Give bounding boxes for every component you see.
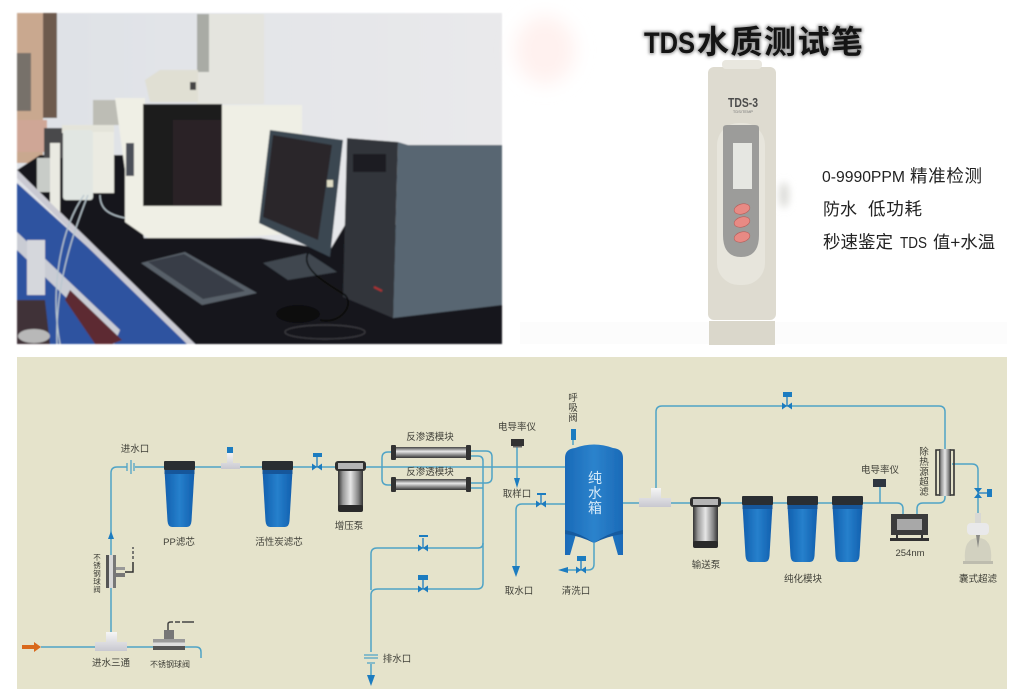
label: vertical valve: 阀 — [93, 585, 101, 594]
arrow: raw water inlet — [22, 642, 41, 652]
icon: purification module 2 — [787, 496, 818, 562]
icon: capsule filter — [963, 513, 993, 564]
arrow: sample — [514, 478, 520, 488]
icon: PP filter — [164, 461, 195, 527]
door at left of the photo — [17, 13, 57, 163]
label: breather valve: 呼 — [568, 393, 578, 404]
title: TDS pen: TDS — [644, 27, 695, 60]
label: ultrafilter: 源 — [919, 467, 929, 478]
label: 清洗口 — [562, 585, 590, 597]
text: pen features: 秒速鉴定 — [823, 232, 893, 252]
icon: valve before booster pump — [312, 453, 322, 470]
label: vertical valve: 锈 — [93, 560, 101, 570]
model label: TDS-3 — [728, 96, 758, 110]
text: pen features — [822, 166, 995, 252]
icon: RO module bottom — [391, 477, 471, 492]
label: 输送泵 — [692, 559, 721, 571]
tubing — [56, 195, 125, 344]
label: vertical valve: 球 — [93, 576, 101, 586]
label: vertical valve: 不 — [93, 553, 101, 562]
icon: reject valve 1 — [418, 535, 428, 552]
title: TDS pen: TDS — [644, 27, 695, 60]
label: 进水口 — [121, 443, 149, 455]
icon: inlet port — [127, 460, 134, 474]
label: 电导率仪 — [861, 464, 899, 476]
label: 取水口 — [505, 585, 533, 597]
label: 反渗透模块 — [406, 431, 454, 443]
text: pen features: 值+水温 — [933, 233, 995, 252]
panel: water purification process diagram — [17, 357, 1007, 689]
label: 不锈钢球阀 — [150, 659, 190, 669]
monitor — [259, 130, 343, 280]
label: PP滤芯 — [163, 536, 195, 548]
label: 排水口 — [383, 653, 411, 665]
icon: booster pump — [335, 461, 366, 512]
icon: flow sensor — [221, 447, 240, 469]
label: ultrafilter: 超 — [919, 476, 929, 488]
icon: breather valve — [571, 429, 576, 440]
label: 电导率仪 — [498, 421, 536, 433]
label: vertical valve: 钢 — [93, 568, 101, 578]
label: breather valve: 吸 — [568, 403, 578, 414]
mouse and cables — [276, 253, 365, 339]
icon: wash valve — [576, 556, 586, 574]
icon: delivery pump — [690, 497, 721, 548]
icon: pure water tank: 纯 — [588, 470, 602, 486]
keyboard — [141, 252, 257, 305]
label: ultrafilter: 除 — [919, 446, 929, 458]
computer tower — [343, 138, 502, 318]
icon: activated carbon filter — [262, 461, 293, 527]
text: pen features: 低功耗 — [868, 199, 922, 219]
label: 进水三通 — [92, 657, 130, 669]
icon: purification module 1 — [742, 496, 773, 562]
instrument column — [145, 14, 264, 104]
text: pen features: 防水 — [823, 200, 857, 219]
analyser instrument — [93, 98, 302, 238]
icon: conductivity meter — [511, 439, 524, 448]
icon: pyrogen-removal ultrafilter — [936, 449, 954, 496]
label: ultrafilter: 滤 — [919, 486, 929, 498]
icon: vertical ball valve — [106, 547, 133, 588]
icon: inlet tee — [95, 632, 127, 651]
lab bench top — [17, 155, 502, 344]
icon: drain port — [364, 655, 378, 663]
icon: RO module top — [391, 445, 471, 460]
icon: horizontal ball valve — [153, 622, 194, 650]
label: 取样口 — [503, 488, 531, 500]
blue bench cabinet — [17, 170, 195, 344]
title: TDS pen: 水质测试笔 — [697, 24, 863, 60]
icon: conductivity meter 2 — [873, 479, 886, 487]
text: pen features: 0-9990PPM — [822, 169, 905, 186]
icon: outlet valve — [536, 493, 546, 508]
icon: capsule filter valve — [974, 488, 992, 498]
icon: pure water tank — [565, 444, 623, 555]
icon: pure water tank: 水 — [588, 485, 602, 501]
arrow: water take-off — [512, 566, 520, 577]
label: 囊式超滤 — [959, 573, 997, 585]
text: pen features: TDS — [900, 235, 927, 252]
label: 反渗透模块 — [406, 466, 454, 478]
label: 增压泵 — [335, 520, 364, 532]
arrow: flow up — [108, 531, 114, 539]
icon: TDS-3 water quality pen — [708, 60, 776, 345]
panel: TDS pen background — [515, 13, 1007, 345]
label: 254nm — [895, 548, 925, 559]
icon: UV lamp 254nm — [890, 514, 929, 541]
icon: reject valve 2 — [418, 575, 428, 592]
pen buttons — [733, 202, 751, 244]
label: 纯化模块 — [784, 573, 822, 585]
panel: laboratory instrument photo — [17, 13, 502, 344]
label: ultrafilter: 热 — [919, 456, 929, 468]
icon: loop valve — [782, 392, 792, 410]
icon: pure water tank: 箱 — [588, 500, 602, 516]
reagent bottle and fittings — [37, 125, 114, 213]
title: TDS pen: 水质测试笔 — [697, 24, 863, 60]
arrow: wash outlet — [558, 567, 568, 573]
icon: outlet tee — [639, 488, 671, 507]
arrow: drain — [367, 675, 375, 686]
label: breather valve: 阀 — [568, 412, 578, 424]
label: 活性炭滤芯 — [255, 536, 303, 548]
icon: purification module 3 — [832, 496, 863, 562]
pipes — [41, 406, 978, 678]
text: pen features: 精准检测 — [910, 166, 982, 186]
icon: TDS-3 water quality pen: TDS/TEMP — [733, 109, 753, 114]
